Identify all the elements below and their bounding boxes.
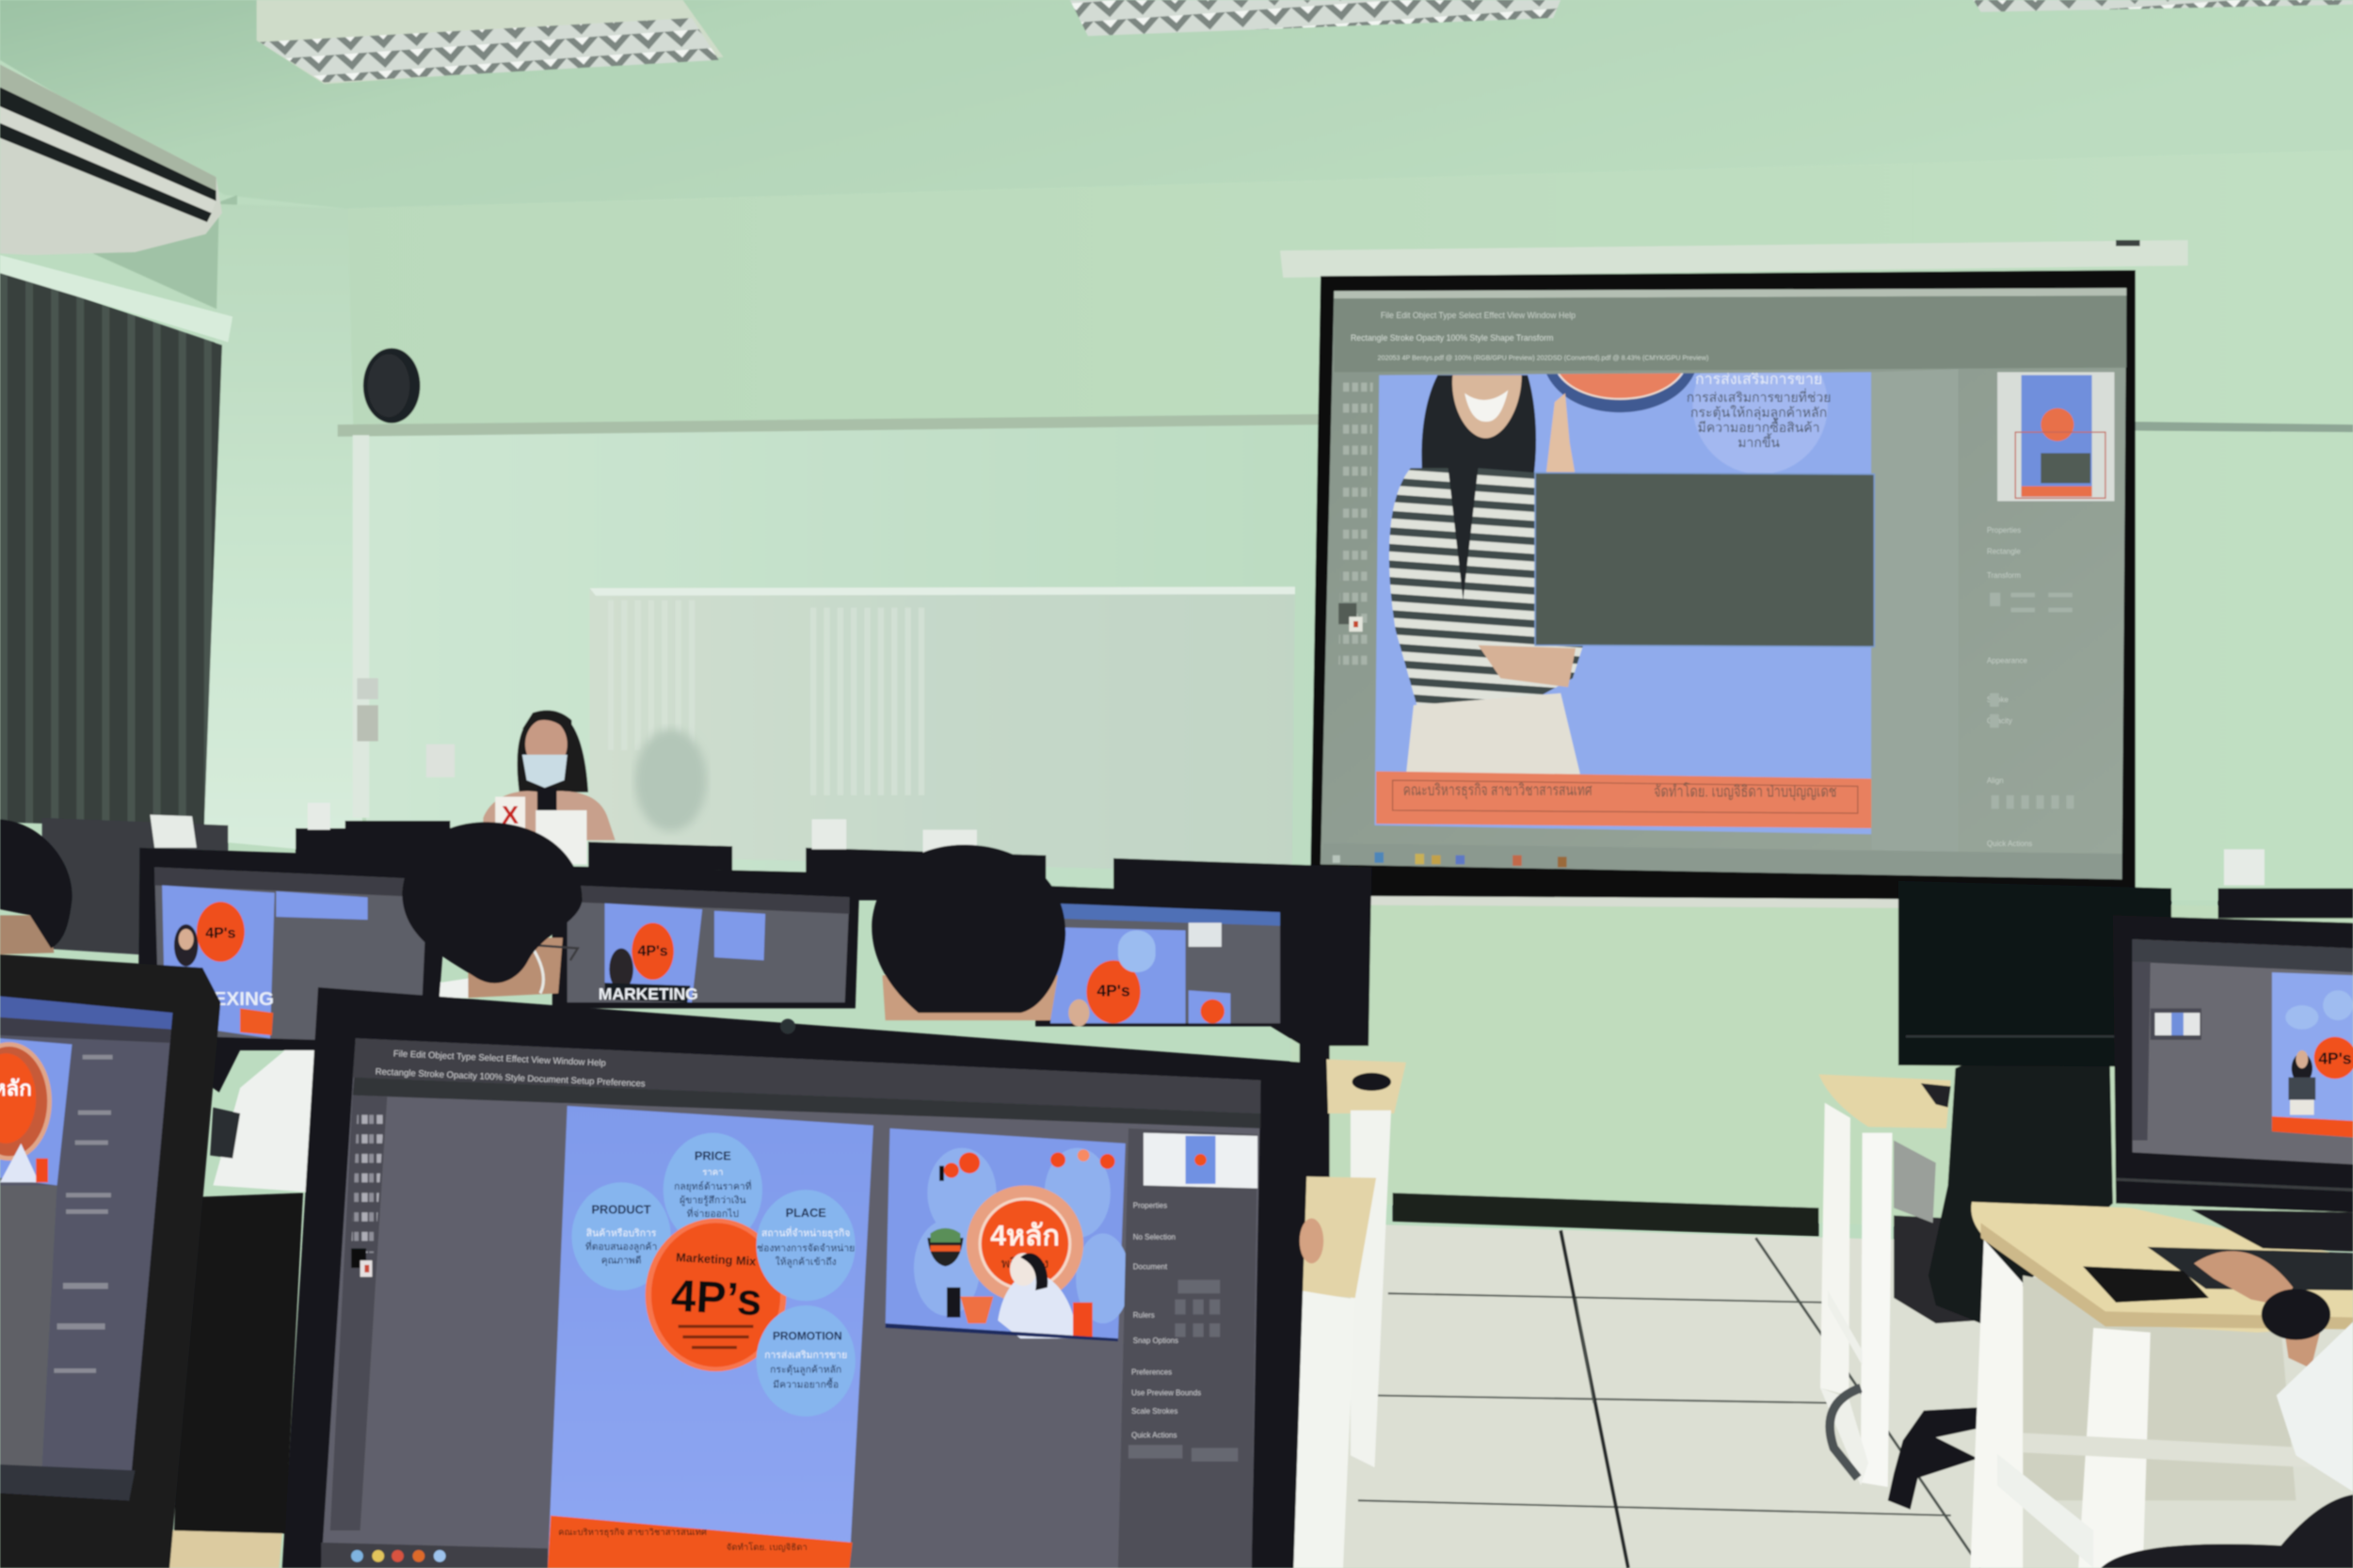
promotion circle: มีความอยากซื้อสินค้า [1698, 418, 1820, 435]
promotion circle: การส่งเสริมการขายที่ช่วย [1687, 389, 1832, 405]
tool icons [1338, 378, 1373, 667]
backrest [1929, 1063, 2113, 1323]
recess behind air conditioner [90, 195, 237, 318]
4 lak badge: 4หลัก [990, 1221, 1060, 1252]
properties labels [1987, 526, 2032, 848]
monitor stand [2191, 1209, 2353, 1252]
artboard [1374, 372, 1871, 834]
properties labels: Opacity [1987, 716, 2012, 725]
properties controls [1990, 593, 2073, 808]
PRODUCT circle: สินค้าหรือบริการ [586, 1227, 657, 1240]
floor [1290, 1192, 2353, 1568]
red X sign [495, 797, 525, 833]
PRICE circle: กลยุทธ์ด้านราคาที่ [674, 1179, 752, 1192]
back monitor two: 4P's [637, 944, 668, 960]
left student head [0, 819, 72, 954]
front legs [1970, 1240, 2023, 1568]
left foreground monitor [0, 954, 220, 1568]
properties labels: Rectangle [1987, 547, 2021, 555]
orange badge crop [0, 1038, 72, 1185]
lower rails [1997, 1454, 2093, 1568]
taskbar [0, 1464, 135, 1500]
webcam [780, 1019, 795, 1033]
PRODUCT circle [571, 1182, 671, 1290]
right desk back [1818, 1074, 1951, 1487]
PRICE circle: ผู้ขายรู้สึกว่าเงิน [680, 1195, 746, 1207]
PROMOTION circle [757, 1305, 856, 1416]
main monitor [282, 987, 1308, 1568]
panel buttons [1128, 1280, 1238, 1462]
PRICE circle: ที่จ่ายออกไป [687, 1207, 739, 1220]
back monitor one: XEXING [200, 988, 274, 1010]
properties rows: Properties [1133, 1201, 1167, 1209]
chair back right [1888, 1063, 2113, 1510]
options bar: Rectangle Stroke Opacity 100% Style Shape Transform [1351, 333, 1553, 343]
dark artboard base [886, 1323, 1118, 1341]
properties rows [1131, 1201, 1201, 1439]
seat [1894, 1215, 1977, 1323]
window blinds [0, 255, 232, 828]
dark selected rectangle [1535, 472, 1874, 647]
screen casing [1280, 240, 2188, 278]
woman on screen [1389, 376, 1583, 775]
PLACE circle [757, 1190, 856, 1301]
back monitor three: 4P's [1096, 982, 1130, 1000]
upper wall [343, 150, 2353, 901]
hand at desk edge [1300, 1219, 1323, 1263]
properties rows: Scale Strokes [1131, 1407, 1177, 1416]
back monitors row [42, 818, 1371, 1046]
keyboard, phone and hand [2083, 1247, 2353, 1568]
artboard left [548, 1106, 873, 1568]
keyboard [1921, 1083, 1951, 1108]
promotion circle: กระตุ้นให้กลุ่มลูกค้าหลัก [1690, 405, 1827, 421]
properties labels: Stroke [1987, 696, 2009, 704]
navigator thumbnail [2151, 1008, 2201, 1040]
tools strip [330, 1096, 387, 1530]
light strip below screen [1310, 896, 2136, 909]
menu labels: File Edit Object Type Select Effect View Window Help [393, 1048, 606, 1069]
screen frame [1310, 270, 2136, 901]
red X sign: X [502, 800, 519, 829]
glass whiteboard [590, 586, 1295, 873]
left pillar [204, 204, 363, 856]
desktop [1971, 1202, 2353, 1333]
artboard right [886, 1128, 1126, 1340]
panel rows [54, 1055, 113, 1373]
PROMOTION circle: การส่งเสริมการขาย [764, 1350, 847, 1361]
PROMOTION circle: มีความอยากซื้อ [773, 1378, 839, 1391]
promotion circle: การส่งเสริมการขาย [1695, 372, 1822, 388]
PRICE circle [664, 1133, 762, 1247]
speaker [363, 348, 420, 424]
foreground desk edge [168, 1530, 282, 1568]
mini woman [2288, 1050, 2315, 1115]
PRODUCT circle: คุณภาพดี [601, 1255, 641, 1266]
right front desk [1970, 1202, 2353, 1568]
properties labels: Transform [1987, 571, 2021, 580]
document tab: 202053 4P Bentys.pdf @ 100% (RGB/GPU Preview) 202DSD (Converted).pdf @ 8.43% (CMYK/GPU Preview) [1378, 355, 1708, 362]
PRICE circle: ราคา [702, 1167, 723, 1177]
modesty panel [2023, 1275, 2296, 1500]
illustrated woman [947, 1253, 1093, 1338]
orange footer: จัดทำโดย. เบญจิธิดา [727, 1542, 808, 1553]
properties labels: Quick Actions [1987, 840, 2032, 848]
back monitor one [138, 848, 450, 1093]
back monitor one: 4P's [205, 925, 236, 941]
PRICE circle: คุ้มค่า [700, 1222, 726, 1233]
tool strip [2133, 962, 2151, 1141]
promotion circle: มากขึ้น [1737, 433, 1780, 450]
small circles [914, 1148, 1130, 1323]
fill and stroke swatch [351, 1248, 372, 1277]
properties rows: Quick Actions [1131, 1431, 1176, 1439]
lower wall [366, 424, 1321, 901]
front leg [1861, 1133, 1893, 1487]
PRODUCT circle: PRODUCT [592, 1203, 651, 1217]
orange footer [1376, 771, 1871, 828]
student one [402, 822, 583, 998]
fill and stroke swatch [1338, 603, 1363, 632]
orange footer [548, 1515, 853, 1568]
base [1888, 1407, 1977, 1510]
desk keyboard behind student [210, 1108, 240, 1159]
orange 4P's blob: Marketing Mix [676, 1250, 757, 1269]
paper notes [150, 803, 2265, 886]
thermostat [426, 744, 455, 777]
orange footer: คณะบริหารธุรกิจ สาขาวิชาสารสนเทศ [1403, 781, 1593, 800]
PLACE circle: สถานที่จำหน่ายธุรกิจ [761, 1226, 850, 1240]
app bars [1334, 296, 2126, 372]
artboard footer [2272, 1116, 2353, 1137]
4 lak badge [967, 1185, 1083, 1303]
mid rail [1828, 1290, 1863, 1366]
left leg [1820, 1103, 1850, 1396]
menu text: File Edit Object Type Select Effect View Window Help [1381, 311, 1576, 320]
properties rows: Use Preview Bounds [1131, 1389, 1201, 1398]
right board rail [2131, 422, 2353, 432]
taskbar [321, 1543, 548, 1568]
student two [872, 845, 1065, 1020]
back monitor two: MARKETING [599, 984, 698, 1003]
navigator thumbnail [1144, 1133, 1257, 1189]
bottom bezel line [2116, 1177, 2353, 1192]
4P's circle [2314, 1037, 2353, 1079]
top highlight [1334, 288, 2126, 298]
mini circles [2285, 990, 2353, 1030]
properties labels: Align [1987, 776, 2004, 785]
board rail [338, 414, 1321, 437]
bezel [282, 987, 1308, 1568]
centre side desk [1290, 1043, 1406, 1568]
options labels: Rectangle Stroke Opacity 100% Style Document Setup Preferences [375, 1066, 646, 1090]
properties rows: Rulers [1133, 1311, 1155, 1320]
taskbar [1321, 843, 2121, 879]
wall below screen [1290, 893, 2353, 1245]
orange badge [1545, 371, 1696, 412]
conduit [353, 435, 369, 818]
PLACE circle: ให้ลูกค้าเข้าถึง [776, 1256, 837, 1268]
right front monitor [2113, 915, 2353, 1252]
PROMOTION circle: กระตุ้นลูกค้าหลัก [770, 1365, 841, 1376]
ceiling light centre [1070, 0, 1561, 36]
PRICE circle: PRICE [695, 1148, 731, 1162]
4 lak badge: พริกแกง [1001, 1256, 1048, 1272]
PLACE circle: PLACE [786, 1206, 826, 1220]
air conditioner [0, 65, 222, 255]
ceiling light left [257, 0, 723, 84]
properties rows: No Selection [1133, 1233, 1176, 1241]
projected area [1321, 288, 2126, 879]
tool icons [351, 1113, 384, 1253]
orange footer: คณะบริหารธุรกิจ สาขาวิชาสารสนเทศ [558, 1528, 707, 1538]
ceiling [0, 0, 2353, 209]
4P's circle: 4P's [2318, 1048, 2352, 1067]
title bar [353, 1038, 1260, 1113]
back monitor two [552, 866, 860, 1008]
properties rows: Document [1133, 1263, 1168, 1272]
PRODUCT circle: ที่ตอบสนองลูกค้า [585, 1240, 657, 1253]
student one shirt [213, 978, 468, 1192]
PLACE circle: ช่องทางการจัดจำหน่าย [757, 1243, 855, 1255]
dark chair between monitors [174, 1192, 303, 1533]
ceiling light right [1974, 0, 2353, 12]
screen [321, 1038, 1260, 1568]
cable [1830, 1388, 1861, 1478]
properties labels: Appearance [1987, 657, 2028, 665]
navigator [1997, 372, 2114, 501]
wall switch box [357, 679, 378, 742]
PROMOTION circle: PROMOTION [773, 1330, 842, 1343]
under-desk bracket [1894, 1141, 1936, 1223]
properties rows: Preferences [1131, 1368, 1172, 1376]
orange 4P's blob [646, 1219, 786, 1371]
tab bar [353, 1078, 1260, 1128]
orange badge fill [1558, 371, 1684, 399]
icons on right artboard [927, 1149, 1115, 1267]
properties labels: Properties [1987, 526, 2021, 535]
casing label [2116, 240, 2140, 246]
bottom rail [1820, 1388, 1868, 1485]
right properties panel [1118, 1128, 1257, 1568]
back right monitor [1898, 881, 2353, 1067]
properties rows: Snap Options [1133, 1336, 1178, 1345]
orange footer: จัดทำโดย. เบญจิธิดา ป่าบปุญญเดช [1654, 782, 1837, 802]
presenter [483, 711, 616, 864]
small artboard [2272, 972, 2353, 1137]
back monitor three [1035, 886, 1297, 1026]
artboard gutter [1871, 369, 1959, 856]
orange 4P's blob: 4P’s [670, 1272, 763, 1325]
promotion circle [1687, 372, 1832, 472]
projection screen [1280, 240, 2188, 909]
